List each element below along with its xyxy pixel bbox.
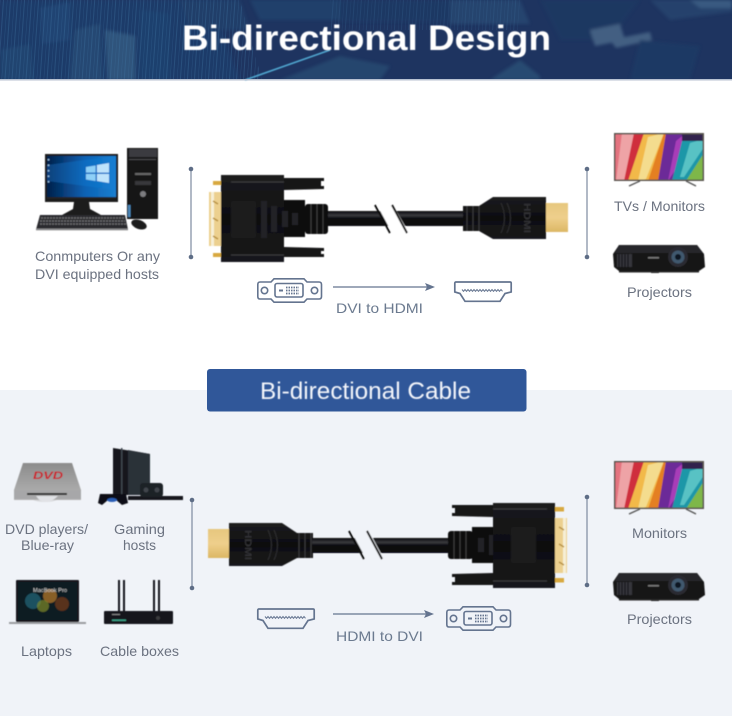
icon: DVI port <box>258 279 322 302</box>
icon: laptop: MacBook Pro <box>33 588 67 594</box>
label: computers: DVI equipped hosts <box>35 266 159 282</box>
caption: HDMI to DVI: HDMI to DVI <box>336 628 423 644</box>
header banner <box>0 0 732 80</box>
panel: DVI to HDMI <box>35 133 705 316</box>
icon: DVD player: DVD <box>33 470 63 482</box>
icon: gaming console <box>98 448 183 505</box>
bracket line right <box>585 167 589 259</box>
label: DVD players: Blue-ray <box>21 537 74 553</box>
heading: Bi-directional Cable: Bi-directional Cable <box>260 378 471 405</box>
label: computers <box>35 248 160 282</box>
icon: DVI port <box>447 607 510 630</box>
icon: projector <box>613 573 705 601</box>
label: Laptops: Laptops <box>21 643 72 659</box>
label: TVs / Monitors: TVs / Monitors <box>614 198 705 214</box>
icon: DVD player <box>14 463 81 502</box>
icon: TV <box>614 133 704 186</box>
label: DVD players: DVD players/ <box>5 521 88 537</box>
label: DVD players <box>5 521 88 553</box>
label: Gaming hosts <box>114 521 165 553</box>
bracket line left <box>190 498 194 590</box>
bracket line right <box>585 495 589 587</box>
icon: laptop <box>9 580 86 624</box>
panel: HDMI to DVI <box>5 448 705 659</box>
title: Bi-directional Design <box>182 19 551 58</box>
label: Gaming hosts: Gaming <box>114 521 165 537</box>
icon: projector <box>613 245 705 273</box>
label: Projectors: Projectors <box>627 611 692 627</box>
label: Cable boxes: Cable boxes <box>100 643 179 659</box>
icon: cable box <box>104 580 173 624</box>
icon: desktop computer <box>36 148 158 231</box>
arrow <box>333 283 435 291</box>
HDMI to DVI cable <box>208 503 567 588</box>
label: Monitors: Monitors <box>632 525 687 541</box>
lower section background <box>0 390 732 716</box>
DVI to HDMI cable: HDMI <box>522 203 532 233</box>
icon: HDMI port <box>455 282 511 301</box>
arrow <box>333 610 434 618</box>
label: Gaming hosts: hosts <box>123 537 156 553</box>
caption: DVI to HDMI: DVI to HDMI <box>336 300 423 316</box>
icon: monitor <box>614 461 704 514</box>
icon: HDMI port <box>258 609 314 628</box>
DVI to HDMI cable <box>209 175 568 262</box>
label: computers: Conmputers Or any <box>35 248 160 264</box>
HDMI to DVI cable: HDMI <box>243 530 253 560</box>
heading: Bi-directional Cable <box>207 369 526 412</box>
bracket line left <box>189 167 193 259</box>
label: Projectors: Projectors <box>627 284 692 300</box>
